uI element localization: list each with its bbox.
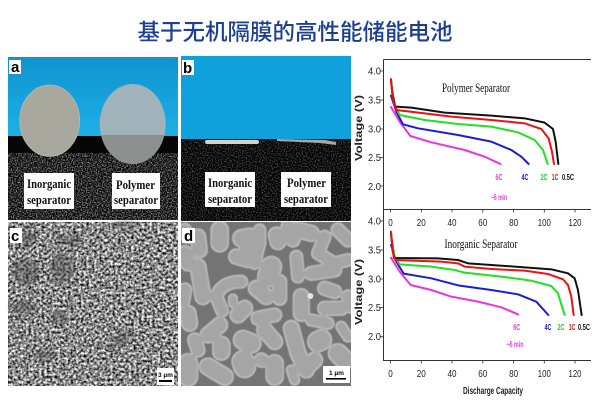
inorganic disc edge [205, 140, 259, 144]
upper x tick labels: 20 [417, 217, 426, 229]
label: inorganic separator a: Inorganic [27, 176, 71, 191]
y tick labels top chart: 2.5 [368, 152, 381, 164]
label: inorganic separator b: separator [208, 191, 252, 206]
rate labels top chart [491, 172, 574, 202]
rate labels top chart: 2C [540, 172, 548, 182]
axes bottom chart [380, 210, 591, 364]
panel letter d: d [184, 228, 193, 245]
label: inorganic separator b [205, 172, 255, 207]
rate labels top chart: 0.5C [562, 172, 574, 182]
upper x tick labels: 80 [509, 217, 518, 229]
black ledge [8, 136, 178, 156]
panel letter b: b [183, 60, 192, 77]
lower x tick labels: 60 [478, 368, 487, 380]
chart heading inorganic: Inorganic Separator [444, 236, 518, 251]
label: inorganic separator b: Inorganic [208, 175, 252, 190]
rate labels top chart: 6C [496, 172, 502, 182]
rate labels bottom chart [506, 322, 590, 349]
inorganic disc [20, 85, 80, 156]
panel b: separators side view [181, 56, 351, 221]
upper x tick labels: 60 [478, 217, 487, 229]
lower x tick labels: 0 [388, 368, 393, 380]
upper x tick labels: 120 [568, 217, 582, 229]
rate labels bottom chart: 0.5C [578, 322, 590, 332]
scale bar d [323, 366, 350, 383]
scale bar c: 3 µm [158, 372, 173, 379]
y tick labels bottom chart: 2.0 [368, 331, 381, 343]
scale bar c [157, 368, 174, 385]
rate labels bottom chart: 4C [544, 322, 552, 332]
blue backdrop [8, 57, 178, 138]
blue backdrop b [181, 56, 351, 140]
panel letter c [10, 228, 22, 245]
lower x tick labels: 80 [509, 368, 518, 380]
chart heading polymer: Polymer Separator [442, 80, 510, 95]
y tick labels bottom chart: 4.0 [368, 216, 381, 228]
lower x tick labels: 100 [538, 368, 551, 380]
polymer disc [99, 84, 167, 165]
curves top chart [391, 79, 558, 164]
rate labels top chart: ~6 min [491, 192, 507, 202]
upper x tick labels [388, 217, 582, 229]
y tick labels top chart: 4.0 [368, 66, 381, 78]
label: polymer separator a [112, 173, 160, 209]
speckled ground [8, 153, 178, 220]
panel letter c: c [11, 228, 19, 245]
rate labels bottom chart: 2C [558, 322, 564, 332]
lower x tick labels: 20 [417, 368, 426, 380]
label: inorganic separator a [24, 173, 74, 209]
x axis title: Discharge Capacity [463, 386, 523, 397]
y tick labels bottom chart [368, 216, 381, 343]
y tick labels bottom chart: 2.5 [368, 302, 381, 314]
particle network [183, 227, 351, 380]
y tick labels top chart: 3.0 [368, 124, 381, 136]
label: polymer separator b [281, 172, 331, 207]
panel letter a: a [11, 59, 20, 76]
panel letter a [9, 59, 21, 76]
lower x tick labels: 40 [448, 368, 457, 380]
y tick labels top chart: 3.5 [368, 94, 381, 106]
axes top chart [380, 60, 591, 212]
scale bar d: 1 µm [329, 370, 344, 377]
title: 基于无机隔膜的高性能储能电池 [138, 20, 452, 45]
y tick labels top chart: 2.0 [368, 181, 381, 193]
panel c: SEM fine texture [8, 221, 178, 386]
panel a: separators front view [8, 57, 178, 220]
rate labels top chart: 1C [552, 172, 558, 182]
lower x tick labels [388, 368, 582, 380]
polymer disc edge [277, 139, 336, 145]
chart: polymer separator discharge curves [354, 60, 591, 212]
y tick labels bottom chart: 3.0 [368, 274, 381, 286]
label: polymer separator a: Polymer [116, 177, 155, 192]
curves bottom chart [391, 232, 582, 315]
y axis title bottom chart: Voltage (V) [354, 259, 365, 325]
y tick labels bottom chart: 3.5 [368, 244, 381, 256]
label: polymer separator a: separator [114, 192, 158, 207]
dark ground b [181, 139, 351, 221]
label: polymer separator b: separator [284, 191, 328, 206]
rate labels bottom chart: ~6 min [506, 339, 524, 349]
upper x tick labels: 100 [538, 217, 551, 229]
label: polymer separator b: Polymer [287, 175, 326, 190]
rate labels top chart: 4C [522, 172, 528, 182]
y tick labels top chart [368, 66, 381, 193]
panel d: SEM coarse blobs [181, 222, 351, 386]
chart: inorganic separator discharge curves [354, 210, 591, 397]
rate labels bottom chart: 6C [513, 322, 520, 332]
dark patches [10, 221, 139, 361]
y axis title top chart: Voltage (V) [354, 95, 365, 161]
label: inorganic separator a: separator [27, 192, 71, 207]
rate labels bottom chart: 1C [569, 322, 575, 332]
upper x tick labels: 40 [448, 217, 457, 229]
upper x tick labels: 0 [388, 217, 393, 229]
lower x tick labels: 120 [568, 368, 582, 380]
